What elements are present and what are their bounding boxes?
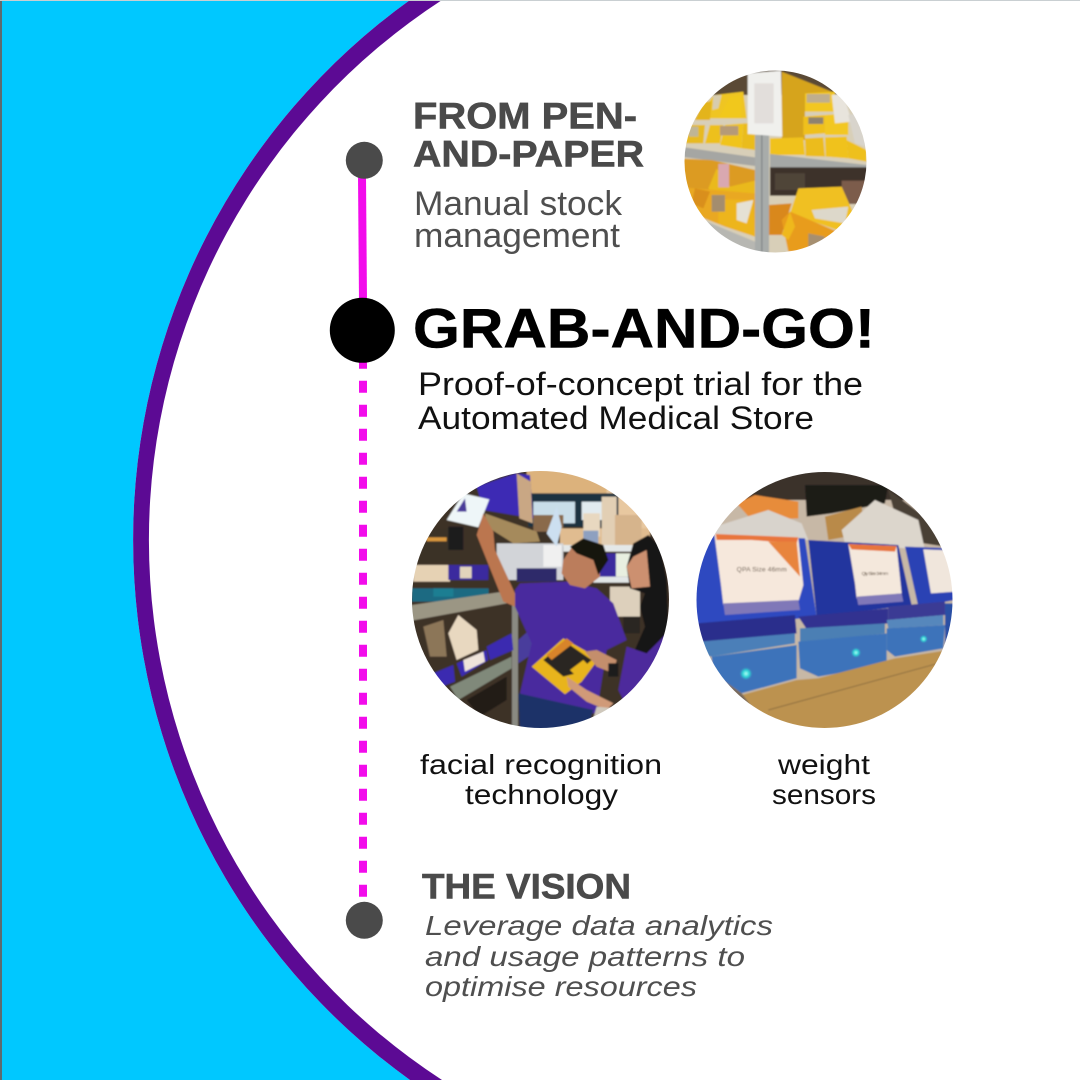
- man: shirt: [515, 582, 627, 713]
- table: [742, 650, 948, 730]
- photo: blue bins on weight sensors: QPA Size 46mm: [737, 567, 787, 574]
- window frame: [528, 493, 618, 527]
- text: vision description: [425, 910, 773, 1002]
- timeline: [330, 142, 395, 939]
- bin label cards: [714, 534, 803, 605]
- tablet screen: [447, 493, 489, 527]
- photo: blue bins on weight sensors: Qty Size 34mm: [862, 571, 888, 577]
- yellow device: [532, 638, 599, 694]
- caption: weight sensors: sensors: [772, 779, 876, 810]
- caption: facial recognition technology: technology: [465, 779, 618, 810]
- timeline node: pen-and-paper: [346, 142, 383, 179]
- caption: weight sensors: [772, 749, 876, 810]
- caption: weight sensors: weight: [777, 749, 870, 780]
- text: manual stock management: management: [414, 217, 621, 255]
- text: proof-of-concept trial: [418, 366, 863, 436]
- heading: the vision: THE VISION: [422, 868, 631, 906]
- caption: facial recognition technology: facial recognition: [420, 749, 662, 780]
- text: proof-of-concept trial: Automated Medical Store: [418, 400, 814, 436]
- timeline node: the vision: [346, 902, 383, 939]
- heading: from pen-and-paper: FROM PEN-: [413, 96, 637, 136]
- text: proof-of-concept trial: Proof-of-concept trial for the: [418, 366, 863, 402]
- text: vision description: Leverage data analytics: [425, 910, 773, 941]
- heading: from pen-and-paper: AND-PAPER: [413, 134, 644, 174]
- photo: blue bins on weight sensors: [696, 472, 952, 728]
- heading: grab-and-go: GRAB-AND-GO!: [413, 296, 875, 360]
- purple bins: [477, 473, 533, 518]
- lower left shelf items: [448, 615, 478, 660]
- photo: yellow stock bins on shelves: [684, 70, 866, 252]
- hands: [567, 677, 613, 710]
- text: vision description: and usage patterns to: [425, 941, 745, 972]
- man: arm: [477, 513, 515, 607]
- bins: [695, 535, 817, 627]
- woman: [627, 535, 668, 660]
- caption: facial recognition technology: [420, 749, 662, 810]
- text: vision description: optimise resources: [425, 971, 697, 1002]
- upper left shelf: [485, 513, 540, 543]
- man: face: [562, 545, 600, 588]
- timeline node: grab-and-go: [330, 298, 395, 363]
- text: manual stock management: [414, 185, 623, 255]
- ceiling: [526, 471, 608, 495]
- sensor units: [712, 645, 797, 693]
- boxes: [533, 515, 563, 532]
- heading: from pen-and-paper: [413, 96, 644, 174]
- text: manual stock management: Manual stock: [414, 185, 623, 223]
- indicator lights: [740, 668, 752, 680]
- photo: staff using facial recognition tablet: [412, 471, 669, 728]
- bin bases: [698, 614, 798, 642]
